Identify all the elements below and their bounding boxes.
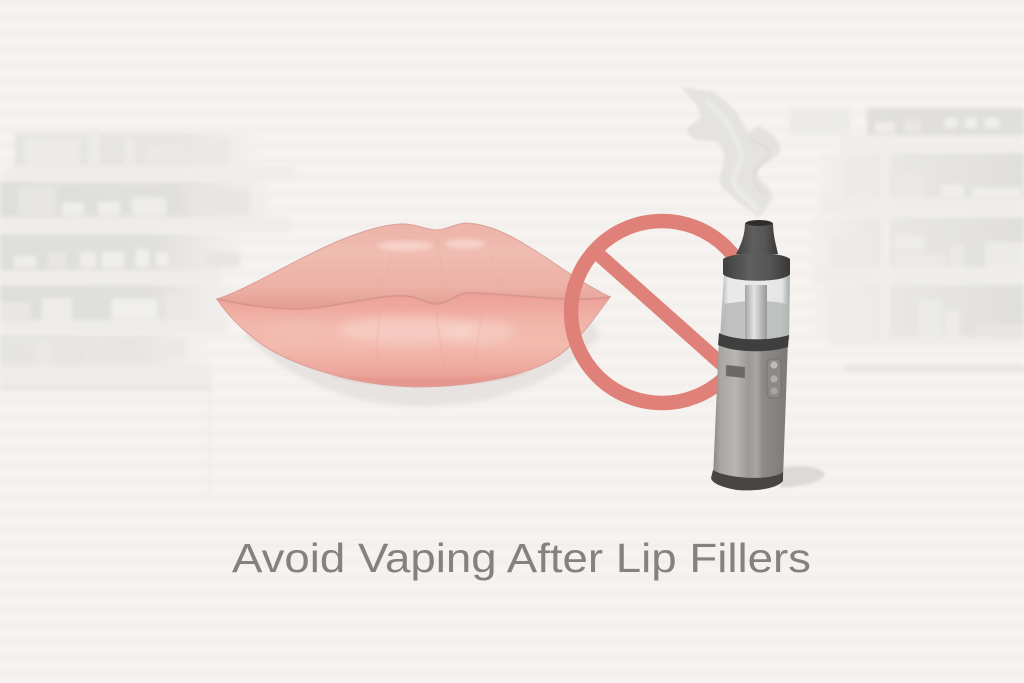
title: Avoid Vaping After Lip Fillers [232, 535, 811, 581]
vape battery body [713, 340, 788, 478]
vape base [711, 470, 783, 490]
vape top cap [723, 253, 790, 281]
prohibition sign [571, 221, 753, 403]
lips drop shadow [245, 320, 600, 406]
vape button panel [767, 359, 781, 398]
vape mouthpiece [736, 221, 778, 254]
vape glass tank [720, 272, 790, 340]
lower lip [217, 293, 610, 387]
background: blurred right pharmacy shelves [790, 108, 1024, 371]
vape mouthpiece opening [746, 220, 772, 226]
background: blurred left pharmacy shelves [0, 130, 295, 498]
upper lip [217, 223, 610, 309]
vape device [682, 87, 825, 490]
sign diagonal bar [598, 254, 725, 367]
vape ground shadow [780, 466, 825, 488]
lips illustration [217, 223, 610, 406]
sign ring [571, 221, 753, 403]
smoke plume [682, 87, 780, 216]
vape collar [718, 333, 789, 351]
vape screen [726, 365, 745, 378]
